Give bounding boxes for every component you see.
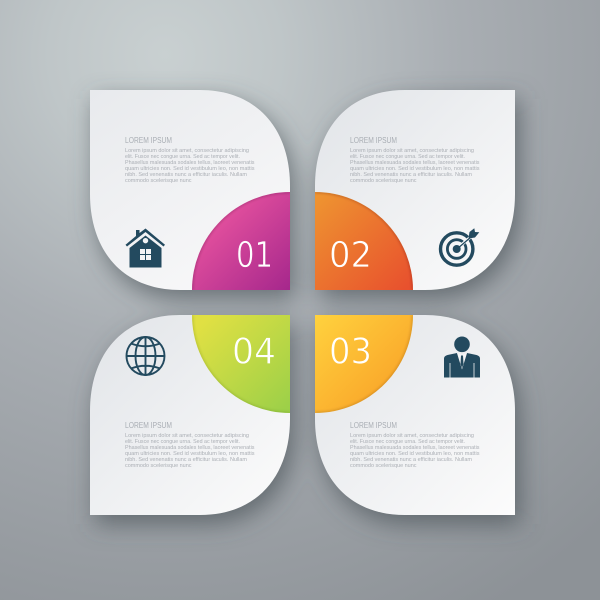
panel 2 body text: nibh. Sed venenatis nunc a efficitur iaculis. Nullam xyxy=(350,172,472,178)
panel 4 body text: elit. Fusce nec congue urna. Sed ac tempor velit. xyxy=(125,439,240,445)
panel 1 xyxy=(90,90,290,290)
panel 2 body text xyxy=(350,148,480,184)
panel 3 body text: Lorem ipsum dolor sit amet, consectetur adipiscing xyxy=(350,433,474,439)
panel 3 xyxy=(315,315,515,515)
icon: businessman xyxy=(444,336,480,378)
panel 1 body text: nibh. Sed venenatis nunc a efficitur iaculis. Nullam xyxy=(125,172,247,178)
panel 3 body text: nibh. Sed venenatis nunc a efficitur iaculis. Nullam xyxy=(350,457,472,463)
panel 3 body text: commodo scelerisque nunc xyxy=(350,463,417,469)
panel 2 heading: LOREM IPSUM xyxy=(350,136,397,145)
icon: target xyxy=(440,228,479,265)
panel 4 body text xyxy=(125,433,255,469)
icon: house xyxy=(126,228,165,268)
panel 1 body text: elit. Fusce nec congue urna. Sed ac tempor velit. xyxy=(125,154,240,160)
panel 2 xyxy=(315,90,515,290)
panel 2 body text: Phasellus malesuada sodales tellus, laoreet venenatis xyxy=(350,160,480,166)
panel 1 body text: Lorem ipsum dolor sit amet, consectetur adipiscing xyxy=(125,148,249,154)
panel 4 xyxy=(90,315,290,515)
panel 2 colour quarter xyxy=(315,190,415,290)
panel shadows xyxy=(95,99,520,524)
panel 4 body text: Phasellus malesuada sodales tellus, laoreet venenatis xyxy=(125,445,255,451)
panel 1 number: 01 xyxy=(236,235,273,276)
panel 4 body text: nibh. Sed venenatis nunc a efficitur iaculis. Nullam xyxy=(125,457,247,463)
panel 3 colour quarter xyxy=(315,315,415,415)
panel 1 heading: LOREM IPSUM xyxy=(125,136,172,145)
panel 4 heading: LOREM IPSUM xyxy=(125,421,172,430)
panel 4 card xyxy=(90,315,290,515)
panel 1 body text: Phasellus malesuada sodales tellus, laoreet venenatis xyxy=(125,160,255,166)
panel 4 colour quarter xyxy=(190,315,290,415)
panel 1 body text: commodo scelerisque nunc xyxy=(125,178,192,184)
panel 1 card xyxy=(90,90,290,290)
panel 2 body text: commodo scelerisque nunc xyxy=(350,178,417,184)
panel 3 heading: LOREM IPSUM xyxy=(350,421,397,430)
panel 3 card xyxy=(315,315,515,515)
panel 2 body text: quam ultricies non. Sed id vestibulum leo, non mattis xyxy=(350,166,480,172)
panel 3 body text xyxy=(350,433,480,469)
panel 1 body text xyxy=(125,148,255,184)
icon: globe xyxy=(126,337,164,375)
panel 2 card xyxy=(315,90,515,290)
panel 4 body text: Lorem ipsum dolor sit amet, consectetur adipiscing xyxy=(125,433,249,439)
panel 1 body text: quam ultricies non. Sed id vestibulum leo, non mattis xyxy=(125,166,255,172)
panel 2 body text: elit. Fusce nec congue urna. Sed ac tempor velit. xyxy=(350,154,465,160)
panel 3 number: 03 xyxy=(329,332,372,372)
panel 2 body text: Lorem ipsum dolor sit amet, consectetur adipiscing xyxy=(350,148,474,154)
panel 3 body text: Phasellus malesuada sodales tellus, laoreet venenatis xyxy=(350,445,480,451)
panel 1 colour quarter xyxy=(190,190,290,290)
panel 2 number: 02 xyxy=(329,235,372,276)
panel 4 body text: commodo scelerisque nunc xyxy=(125,463,192,469)
panel 3 body text: elit. Fusce nec congue urna. Sed ac tempor velit. xyxy=(350,439,465,445)
panel 4 number: 04 xyxy=(232,332,276,372)
panel 4 body text: quam ultricies non. Sed id vestibulum leo, non mattis xyxy=(125,451,255,457)
panel 3 body text: quam ultricies non. Sed id vestibulum leo, non mattis xyxy=(350,451,480,457)
